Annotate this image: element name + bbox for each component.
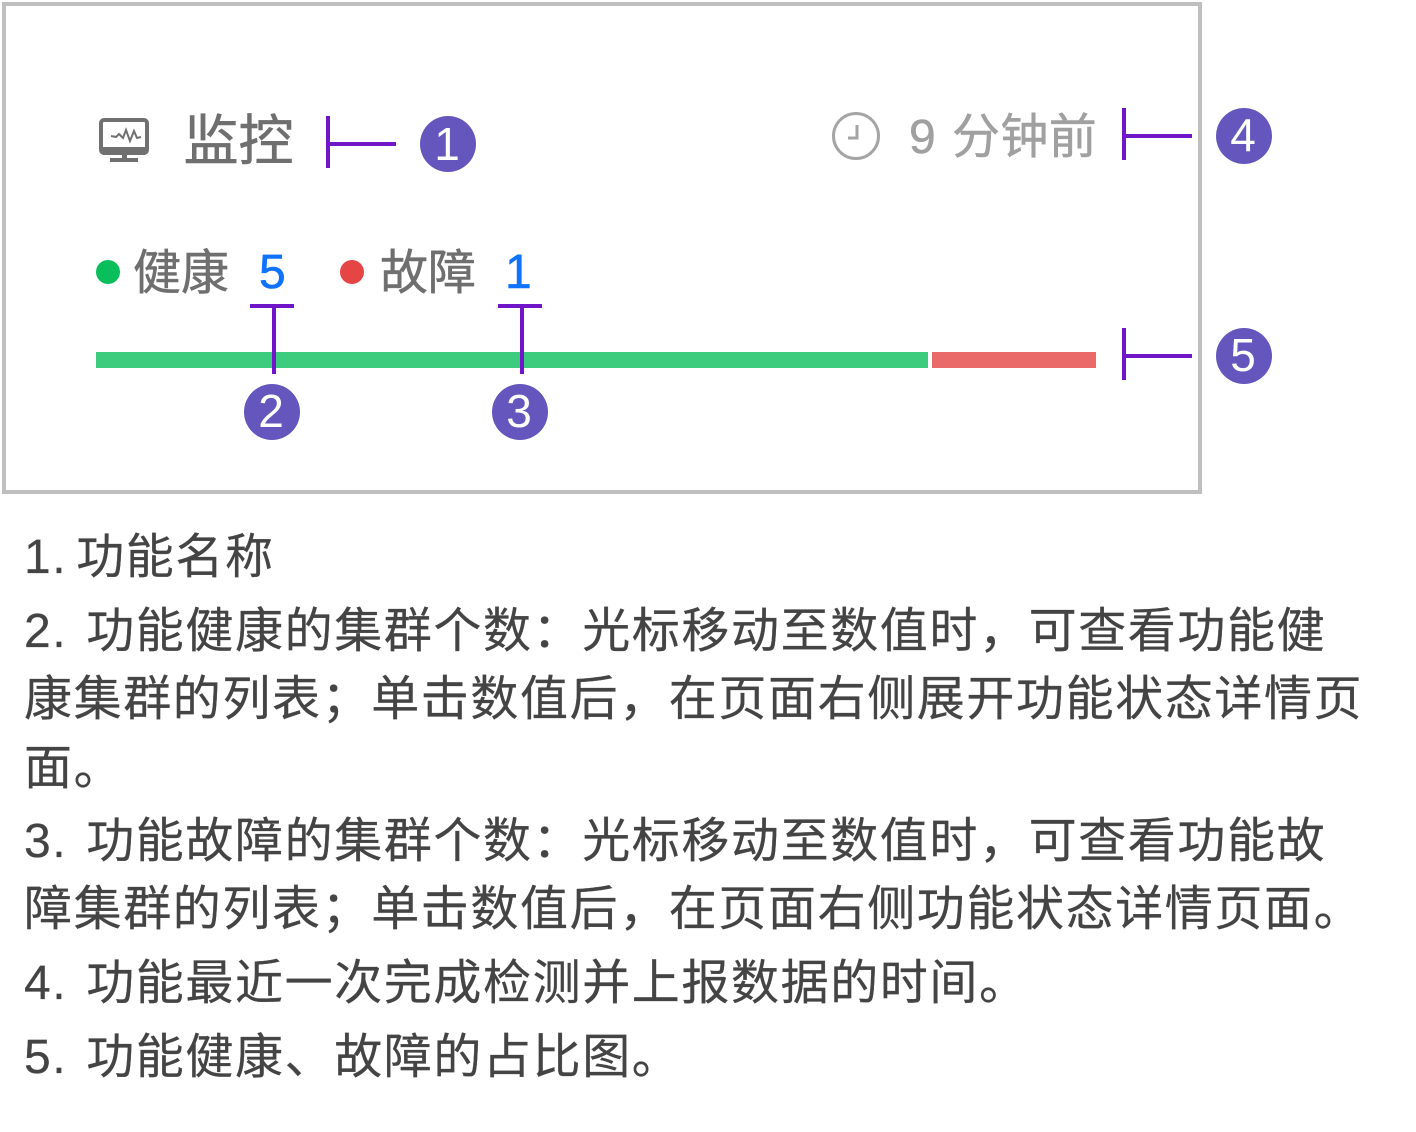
- callout 2: 2: [258, 385, 284, 437]
- item 5: 5.: [24, 1031, 67, 1084]
- callout 3: [492, 306, 548, 440]
- timestamp: 9: [909, 111, 936, 164]
- callout 5: [1124, 328, 1272, 384]
- panel: monitoring card: [4, 4, 1200, 492]
- item 4: 4.: [24, 957, 67, 1010]
- callout 4: [1124, 108, 1272, 164]
- item 1: 1.: [24, 531, 67, 584]
- item 5: 功能健康、故障的占比图。: [86, 1031, 681, 1084]
- callout 1: 1: [434, 118, 460, 170]
- item 4: 功能最近一次完成检测并上报数据的时间。: [86, 957, 1029, 1010]
- callout 4: 4: [1230, 109, 1256, 161]
- heading: 监控: 监控: [184, 110, 294, 172]
- callout 5: 5: [1230, 329, 1256, 381]
- item 2: 2.: [24, 605, 67, 658]
- icon: monitor: [101, 120, 147, 162]
- status dot: fault: [340, 260, 364, 284]
- callout 1: [328, 116, 476, 172]
- description list: [24, 531, 1363, 1084]
- label: 健康: 健康: [133, 247, 229, 300]
- item 2: 功能健康的集群个数：光标移动至数值时，可查看功能健: [86, 605, 1326, 658]
- item 2: 面。: [24, 742, 123, 795]
- callout 3: 3: [506, 385, 532, 437]
- item 3: 障集群的列表；单击数值后，在页面右侧功能状态详情页面。: [24, 883, 1363, 936]
- icon: clock: [834, 114, 878, 158]
- status dot: healthy: [96, 260, 120, 284]
- item 3: 3.: [24, 815, 67, 868]
- timestamp: 分钟前: [952, 111, 1097, 164]
- ratio bar: [96, 352, 1096, 368]
- item 2: 康集群的列表；单击数值后，在页面右侧展开功能状态详情页: [24, 673, 1363, 726]
- item 2: [24, 605, 1363, 795]
- callout 2: [244, 306, 300, 440]
- fault count: 1: [505, 246, 532, 299]
- item 1: 功能名称: [76, 531, 275, 584]
- item 3: [24, 815, 1363, 936]
- item 3: 功能故障的集群个数：光标移动至数值时，可查看功能故: [86, 815, 1326, 868]
- healthy count: 5: [259, 246, 286, 299]
- label: 故障: 故障: [380, 247, 476, 300]
